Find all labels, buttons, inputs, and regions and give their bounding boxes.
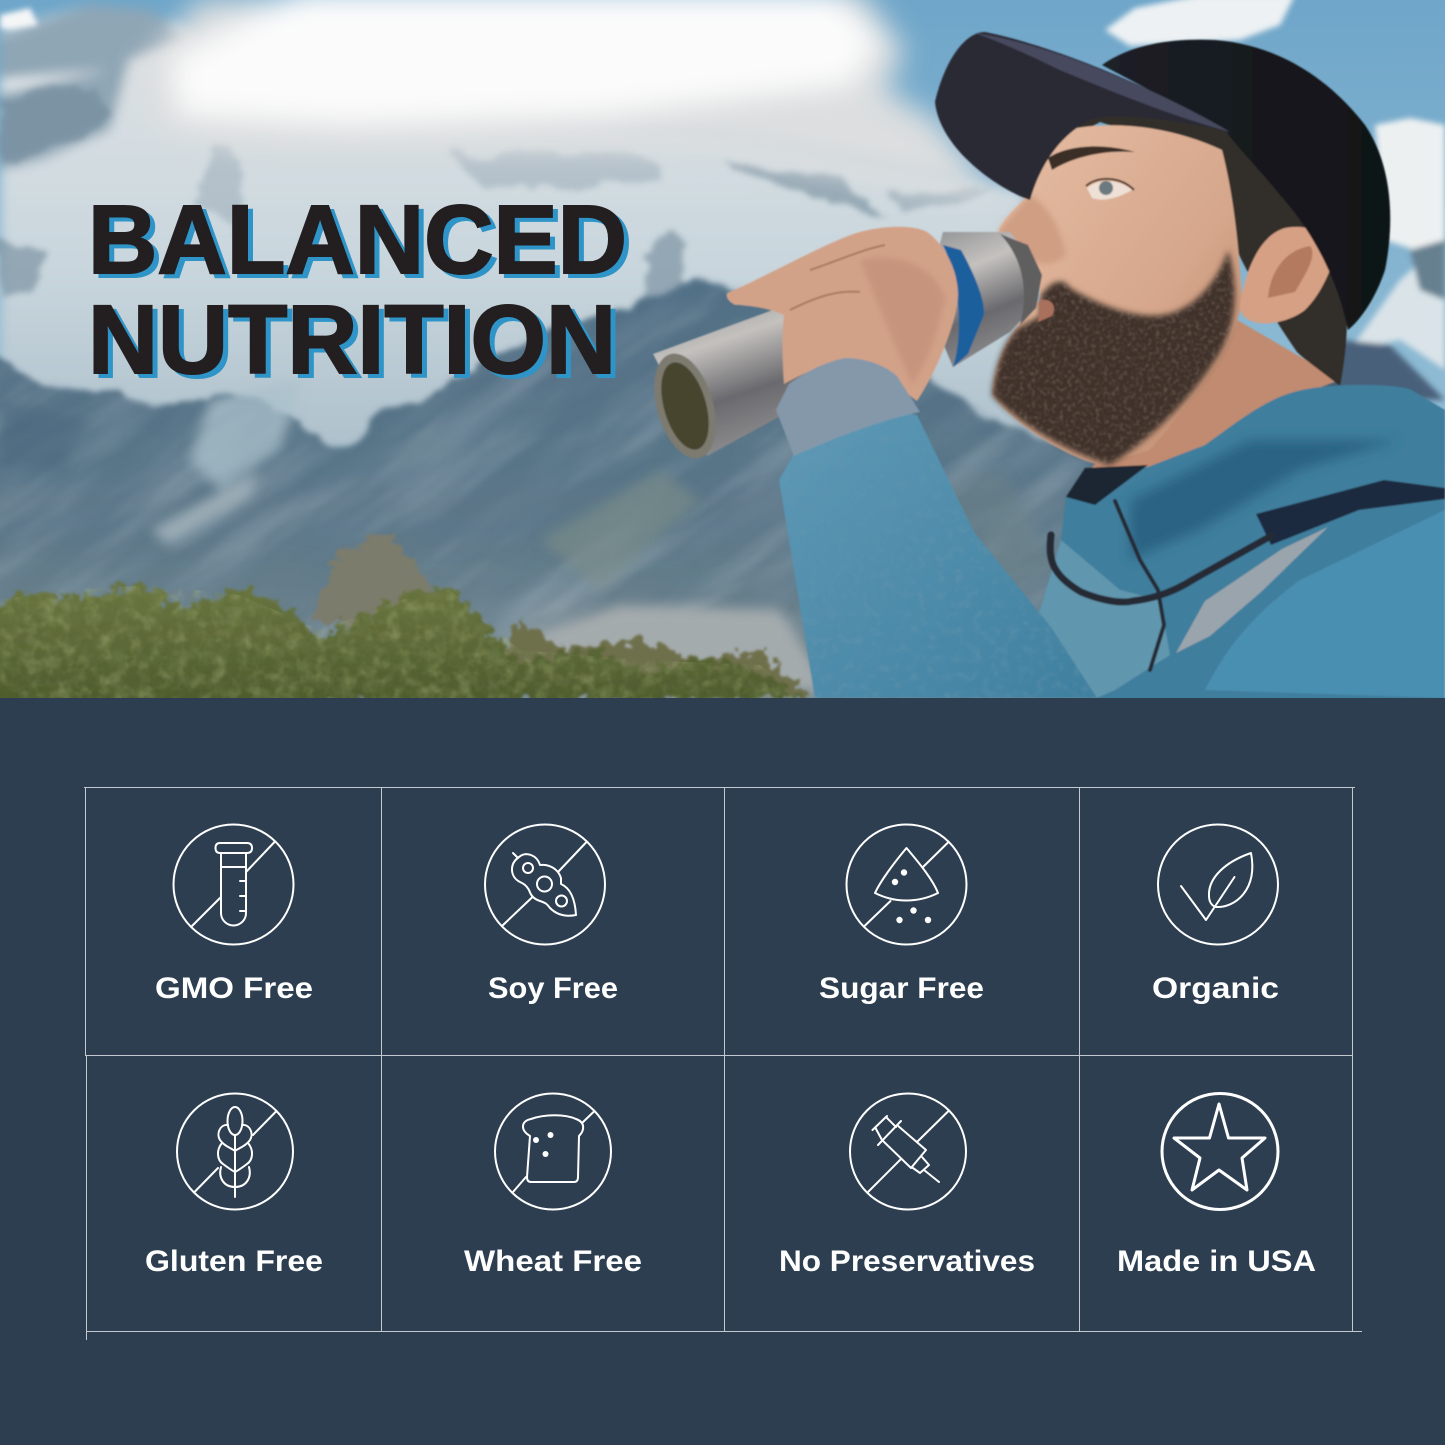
icon: wheat crossed out [177,1094,293,1210]
cell: No Preservatives: No Preservatives [779,1245,1035,1278]
icon: soybean pod crossed out [485,824,605,944]
grid lines [84,787,1362,1340]
jacket body [1035,385,1445,700]
cell: Sugar Free: Sugar Free [819,972,984,1005]
title text [88,185,627,394]
face [992,125,1242,465]
icon: sugar wedge crossed out [846,824,966,944]
man drinking from bottle [643,32,1445,700]
nose and cheek shading [999,195,1066,264]
raised sleeve [775,405,1105,700]
cell: Made in USA: Made in USA [1117,1245,1316,1278]
cap crown [1102,40,1390,330]
cuff [776,358,920,456]
dark strap [1256,480,1445,545]
neck [1090,310,1340,470]
hair [1076,115,1348,386]
drawcords [1050,501,1271,670]
title shadow [93,189,632,398]
cell: Organic [1152,824,1279,1005]
bottle [643,232,1042,466]
glacier and pale slopes [0,388,695,584]
valley floor [500,605,830,690]
hand [727,227,958,401]
sky and mountain backdrop [0,0,1445,698]
title text: NUTRITION [88,285,616,394]
clouds at right [0,0,1445,400]
cell: Soy Free: Soy Free [488,972,618,1005]
panel: product attributes [0,698,1445,1445]
icon: syringe crossed out [850,1094,966,1210]
cell: GMO Free [155,824,313,1005]
cell: GMO Free: GMO Free [155,972,313,1005]
icon: bread crossed out [495,1094,611,1210]
exposed rock patches in the snow [0,83,986,300]
hero photo [0,0,1445,698]
cell: Gluten Free: Gluten Free [145,1245,323,1278]
title shadow: BALANCED [93,189,632,298]
cell: Made in USA [1117,1094,1316,1278]
bushes in the foreground [0,535,820,710]
cap peak [935,32,1230,200]
brow and eye [1048,146,1135,170]
cell: Organic: Organic [1152,972,1279,1005]
cell: Wheat Free: Wheat Free [464,1245,642,1278]
dark collar [1066,465,1148,505]
grey strap [1176,527,1328,653]
cell: Wheat Free [464,1094,642,1278]
main cloud [140,0,1000,200]
mountain rock streaks [0,288,1085,698]
cell: Gluten Free [145,1094,323,1278]
dark lower mountain [0,275,1120,720]
ear [1240,227,1334,324]
icon: leaf with check [1158,824,1278,944]
icon: test tube crossed out [174,824,294,944]
beard [985,245,1245,470]
title [88,185,632,398]
cell: Soy Free [485,824,618,1005]
title text: BALANCED [88,185,627,294]
cell: Sugar Free [819,824,984,1005]
cell: No Preservatives [779,1094,1035,1278]
icon: star [1162,1094,1278,1210]
snow field [0,2,1046,448]
title shadow: NUTRITION [93,289,621,398]
